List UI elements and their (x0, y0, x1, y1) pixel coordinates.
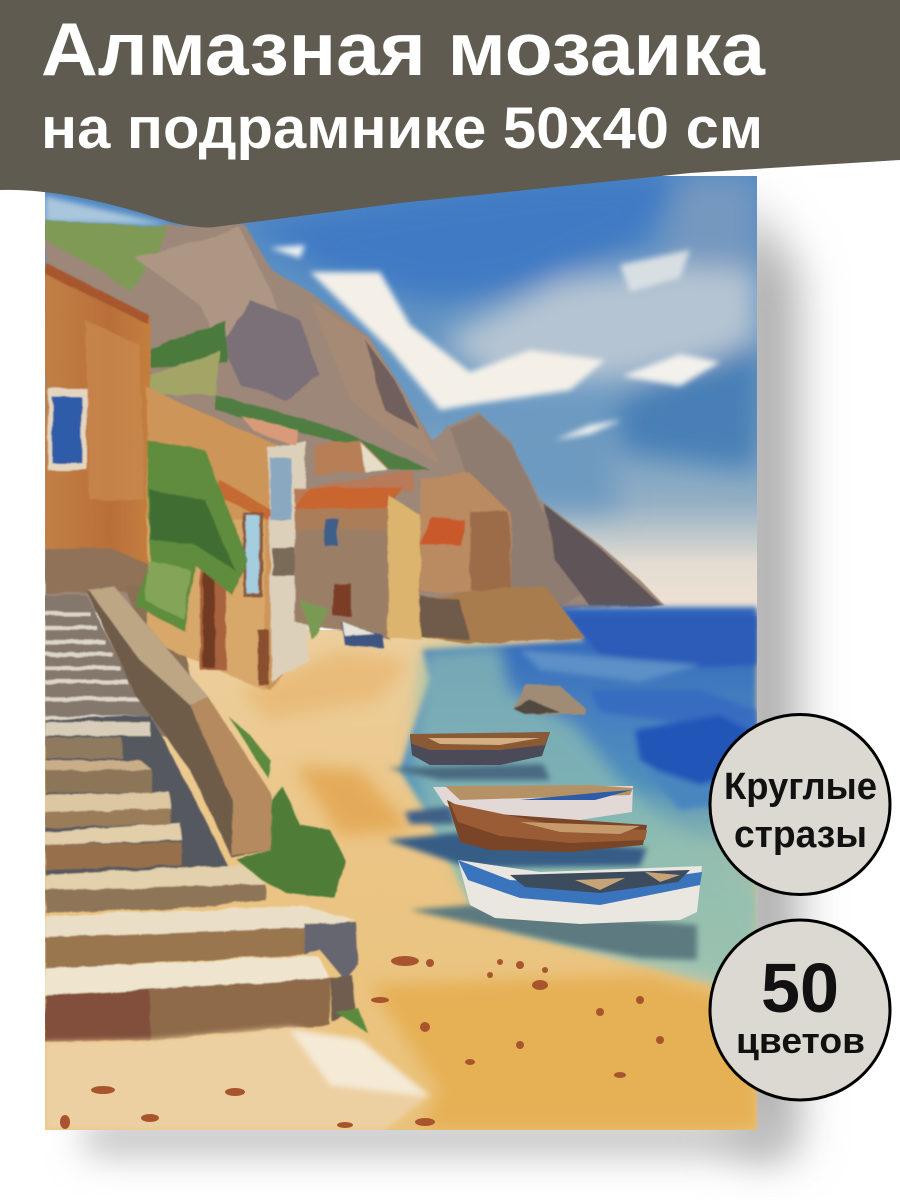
stairs, upper flight (45, 595, 165, 735)
middle houses (125, 388, 585, 690)
boat 4 (458, 860, 702, 924)
sea (400, 607, 757, 998)
boat shadows (387, 764, 697, 960)
boat 1 (410, 732, 550, 765)
beach sand (45, 630, 757, 1130)
stone wall (86, 587, 272, 858)
badge: round rhinestones: стразы (734, 814, 867, 856)
painting: seaside village (45, 176, 757, 1130)
badge: round rhinestones (710, 714, 890, 894)
badge: 50 colours: 50 (761, 949, 839, 1027)
boat 3 (447, 800, 647, 852)
boat 2 (433, 786, 633, 823)
green bushes (230, 718, 367, 1032)
left house (45, 262, 153, 593)
badge: round rhinestones: Круглые (724, 766, 877, 808)
title line 1: Алмазная мозаика (41, 7, 766, 91)
boats (387, 732, 702, 960)
rock in the water (513, 684, 585, 714)
canvas shadow (85, 195, 795, 1154)
title line 2: на подрамнике 50х40 см (41, 96, 763, 161)
sky (45, 176, 757, 616)
staircase, lower flight (45, 715, 358, 1042)
mountains (45, 220, 665, 612)
badge: 50 colours: цветов (736, 1020, 865, 1061)
badge: 50 colours (710, 920, 890, 1100)
title banner (0, 0, 900, 227)
foreground sand and pebbles (45, 956, 757, 1130)
